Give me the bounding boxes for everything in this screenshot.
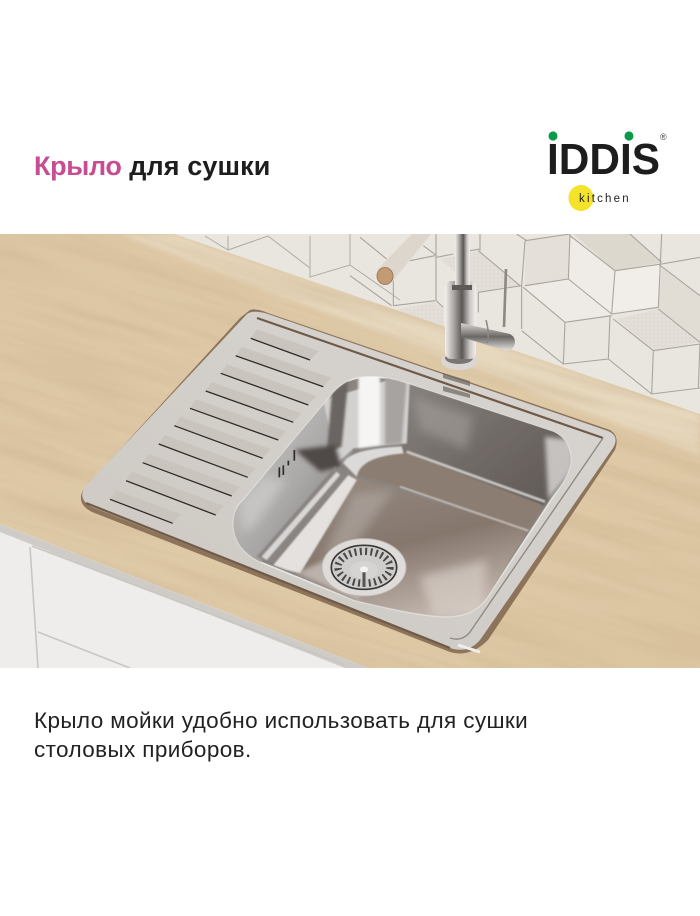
logo: IDDIS kitchen: IDDIS xyxy=(547,135,660,184)
bright curved corner xyxy=(343,447,403,477)
faucet spout xyxy=(455,234,470,286)
faucet lever xyxy=(461,323,515,350)
body text xyxy=(34,708,528,762)
wooden countertop xyxy=(0,234,700,668)
wooden-ended pipe xyxy=(377,234,431,282)
tiled wall xyxy=(170,234,700,424)
body text: Крыло мойки удобно использовать для сушки xyxy=(34,708,528,733)
drain strainer xyxy=(322,539,406,596)
logo: IDDIS kitchen: ® xyxy=(660,132,667,142)
back left corner reflections xyxy=(324,380,410,462)
logo: IDDIS kitchen xyxy=(547,131,667,211)
faucet reflection on rim xyxy=(443,373,470,398)
sink deck xyxy=(82,312,616,650)
sink floor xyxy=(297,477,528,617)
bright floor strip xyxy=(273,475,357,573)
drying wing ribs xyxy=(110,329,331,523)
faucet xyxy=(377,234,515,370)
logo: IDDIS kitchen: kitchen xyxy=(579,193,631,205)
faucet body xyxy=(445,281,476,359)
sink bowl xyxy=(230,373,577,617)
photo: kitchen sink on wooden countertop xyxy=(0,234,700,668)
left wall xyxy=(230,390,353,567)
rim groove lines xyxy=(86,318,603,648)
body text: столовых приборов. xyxy=(34,737,252,762)
sink xyxy=(81,309,617,654)
faucet handle rod xyxy=(504,269,506,327)
floor upper band xyxy=(357,452,543,530)
sink rim shadow xyxy=(81,309,617,654)
faucet base xyxy=(441,352,477,370)
overflow slots xyxy=(279,450,294,477)
white cabinet front xyxy=(0,524,368,668)
back wall xyxy=(400,384,571,506)
title: Крыло для сушки xyxy=(34,151,270,181)
